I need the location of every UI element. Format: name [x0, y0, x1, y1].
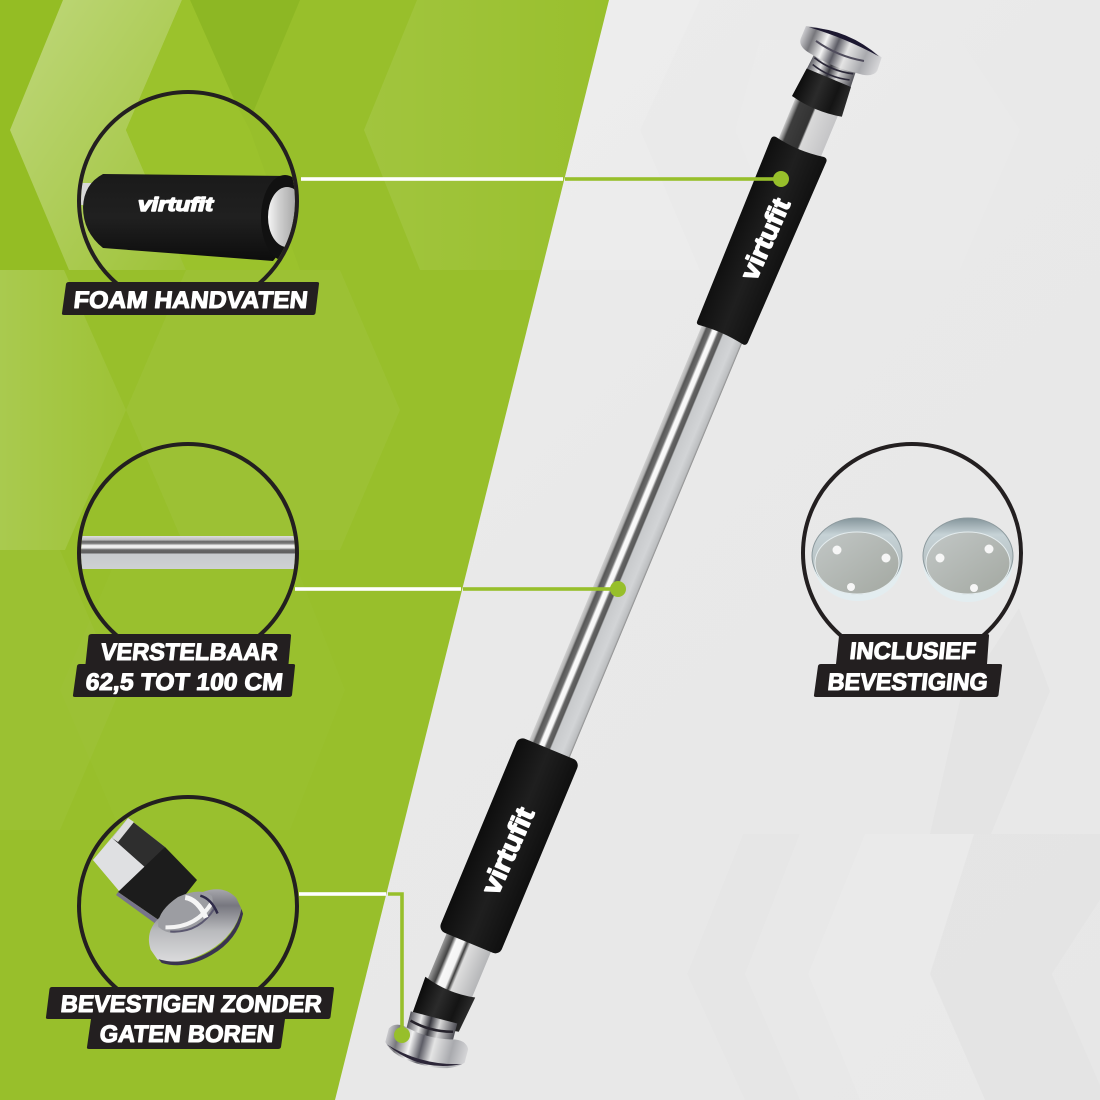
panel: verstelbaar callout [73, 444, 298, 697]
panel: foam handvaten callout [62, 92, 319, 315]
green diagonal panel with hexagon pattern [0, 0, 609, 1100]
connector: mounting without drilling [299, 892, 410, 1043]
label: verstelbaar 62,5 tot 100 cm: VERSTELBAAR [99, 639, 279, 666]
virtufit logo on lower grip: virtufit [476, 803, 540, 899]
circle outline [79, 797, 297, 1015]
label: foam handvaten: FOAM HANDVATEN [72, 287, 309, 314]
icon: upper tube end [775, 92, 840, 165]
label: inclusief bevestiging [814, 634, 1002, 697]
virtufit logo on upper grip: virtufit [734, 193, 796, 284]
circle outline [79, 92, 297, 310]
circle outline [79, 444, 297, 662]
icon: lower tube end [426, 927, 494, 1001]
label: bevestigen zonder gaten boren [46, 987, 334, 1049]
connector: adjustable rod [295, 581, 626, 597]
icon: foam grip closeup [78, 174, 309, 261]
label: inclusief bevestiging: INCLUSIEF [848, 638, 977, 665]
label: bevestigen zonder gaten boren: GATEN BOREN [98, 1021, 275, 1048]
icon: bottom end cap [382, 1007, 474, 1075]
pull-up bar product [376, 19, 887, 1086]
icon: end cap closeup [93, 818, 243, 966]
label: verstelbaar 62,5 tot 100 cm: 62,5 TOT 100 CM [84, 669, 284, 696]
circle outline [803, 444, 1021, 662]
icon: top collar [791, 67, 854, 120]
panel: inclusief bevestiging callout [803, 444, 1021, 697]
icon: upper foam grip [694, 135, 828, 347]
icon: bottom collar [410, 977, 475, 1035]
icon: lower foam grip [438, 736, 580, 955]
label: verstelbaar 62,5 tot 100 cm [73, 634, 295, 697]
icon: top end cap [790, 20, 885, 97]
icon: bar tube [522, 305, 751, 774]
label: bevestigen zonder gaten boren: BEVESTIGEN ZONDER [59, 991, 323, 1018]
icon: right mounting cup [923, 518, 1013, 602]
logo: virtufit on closeup: virtufit [138, 195, 214, 216]
icon: chrome rod closeup [78, 536, 298, 569]
connector: foam handles [301, 171, 789, 187]
icon: left mounting cup [812, 518, 903, 601]
panel: bevestigen zonder gaten boren callout [46, 797, 334, 1049]
label: inclusief bevestiging: BEVESTIGING [826, 669, 989, 696]
